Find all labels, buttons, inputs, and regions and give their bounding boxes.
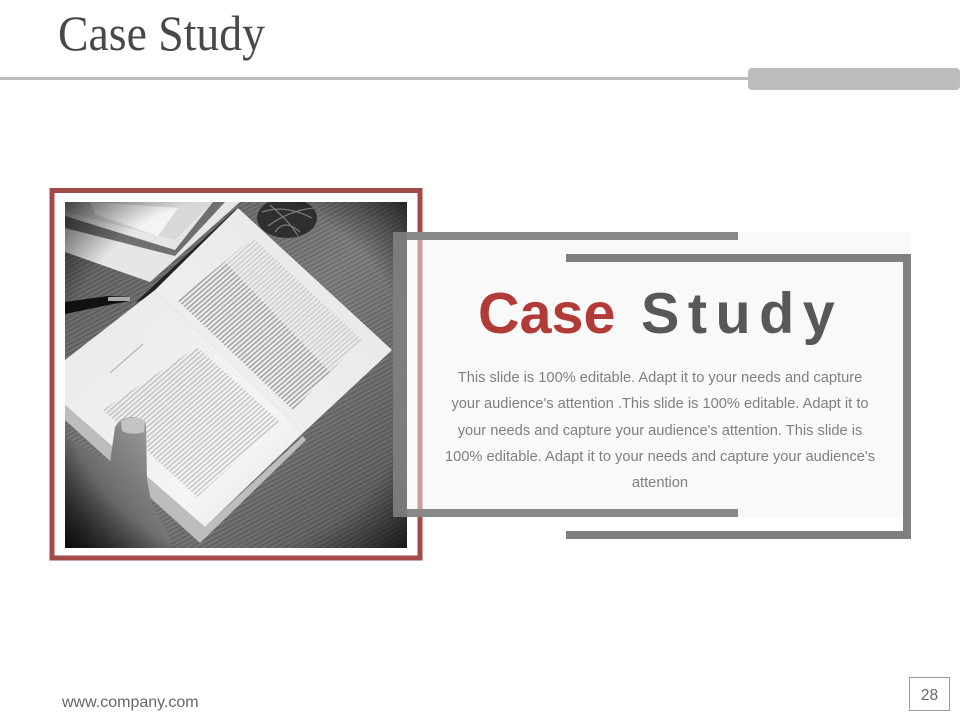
right page (155, 208, 392, 433)
panel body text: your needs and capture your audience's attention. This slide is (458, 423, 862, 439)
panel: photo with red frame (52, 190, 420, 558)
photo: open book on wooden desk (65, 198, 407, 548)
panel heading: Case (478, 282, 615, 346)
left page text (103, 347, 280, 497)
vignette (65, 202, 407, 548)
panel body text: attention (632, 475, 688, 491)
page number: 28 (921, 687, 938, 704)
panel background (407, 232, 911, 517)
photo frame (52, 190, 420, 558)
panel body text (445, 370, 875, 491)
panel body text: This slide is 100% editable. Adapt it to your needs and capture (458, 370, 862, 386)
left page (65, 290, 303, 527)
right page text (177, 238, 362, 410)
panel: case study text (393, 232, 911, 539)
header rule and tab (0, 68, 960, 90)
title: Case Study (58, 5, 265, 61)
left bracket (393, 232, 738, 517)
panel heading: Study (641, 282, 843, 346)
right bracket (566, 254, 911, 539)
page number (910, 678, 950, 710)
pen (65, 296, 130, 314)
stacked papers (65, 202, 240, 282)
footer website: www.company.com (61, 694, 199, 711)
panel body text: 100% editable. Adapt it to your needs and capture your audience's (445, 449, 875, 465)
ball of twine (257, 198, 317, 238)
hand and thumb (65, 417, 172, 548)
frame seen through panel (418, 240, 422, 509)
panel body text: your audience's attention .This slide is 100% editable. Adapt it to (451, 396, 869, 412)
dark spine shadow (135, 207, 240, 303)
book page edges (65, 405, 306, 543)
